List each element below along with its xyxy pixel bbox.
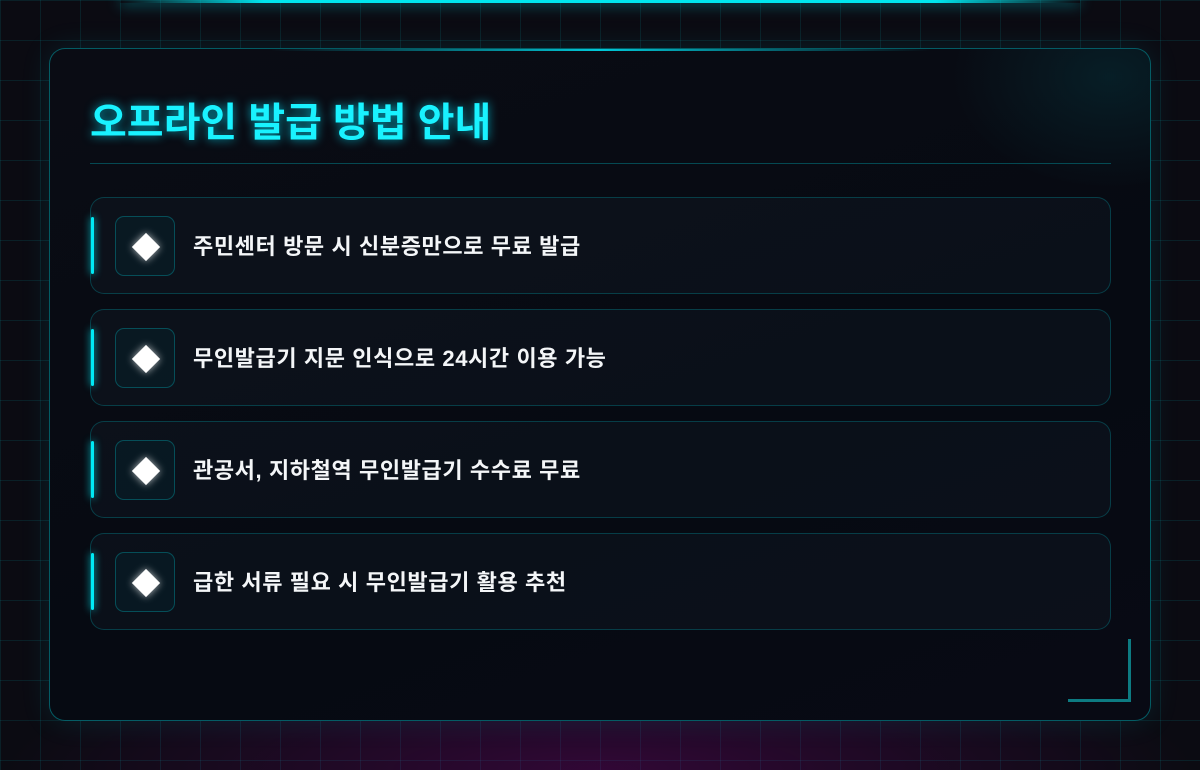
item 4: 급한 서류 필요 시 무인발급기 활용 추천 bbox=[193, 570, 567, 595]
item 3 bbox=[90, 421, 1111, 518]
item 2: 무인발급기 지문 인식으로 24시간 이용 가능 bbox=[193, 346, 607, 371]
title: 오프라인 발급 방법 안내 bbox=[90, 101, 491, 145]
item 3: 관공서, 지하철역 무인발급기 수수료 무료 bbox=[193, 458, 581, 483]
corner bracket bbox=[1068, 639, 1131, 702]
item 1 bbox=[90, 197, 1111, 294]
item 2 bbox=[90, 309, 1111, 406]
item 4 bbox=[90, 533, 1111, 630]
item 1: 주민센터 방문 시 신분증만으로 무료 발급 bbox=[193, 234, 581, 259]
